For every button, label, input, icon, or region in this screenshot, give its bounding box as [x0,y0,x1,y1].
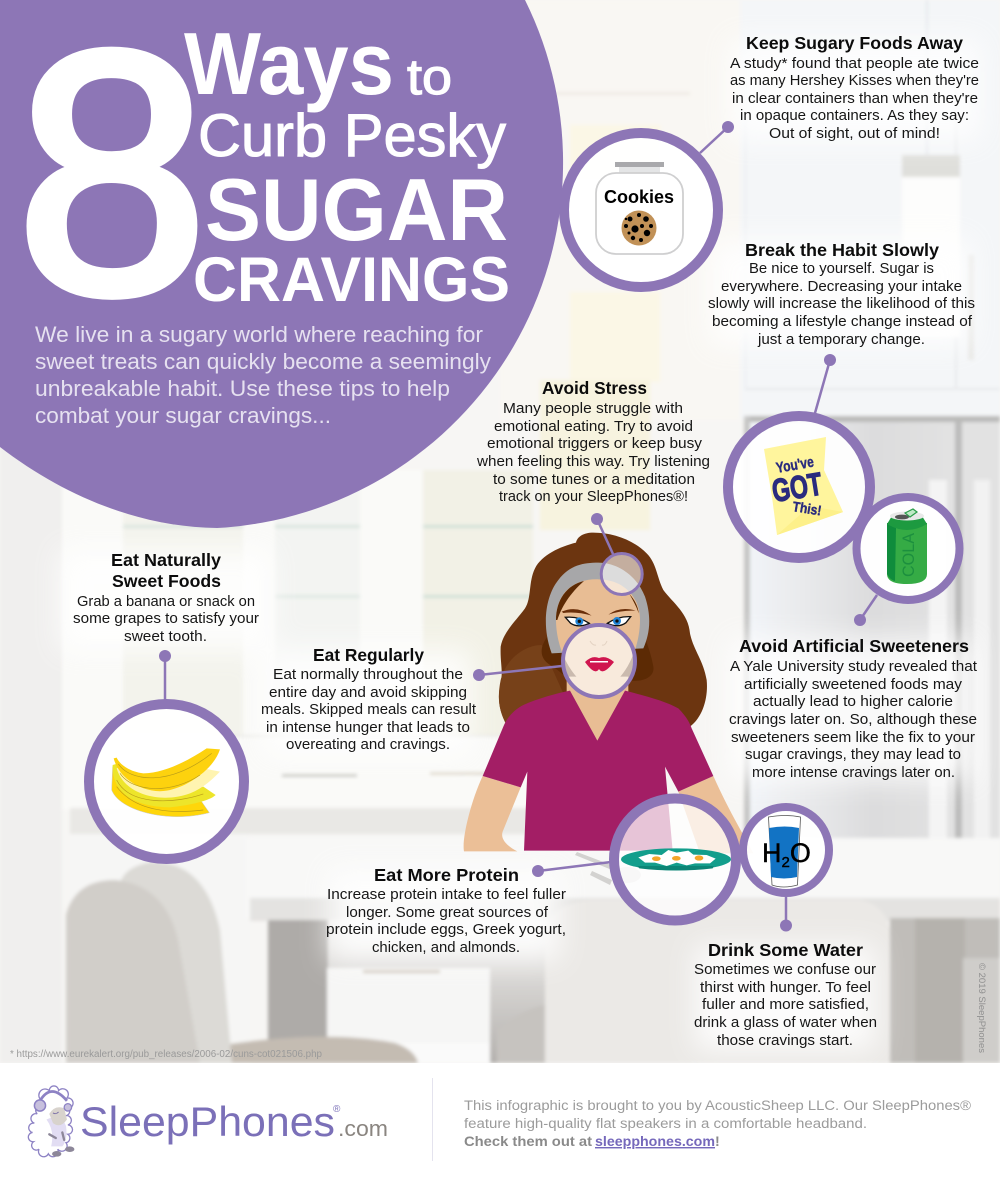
tip: eat regularly: Eat normally throughout the [273,667,463,683]
icon: water glass circle: H [762,838,782,868]
tip: break the habit slowly [708,240,975,348]
tip: break the habit slowly: just a temporary change. [757,332,925,348]
tip: keep sugary foods away: in opaque containers. As they say: [740,108,969,124]
tip: drink some water: fuller and more satisfied, [702,997,869,1013]
arms [464,776,521,851]
tip: eat more protein [326,865,566,956]
tip: avoid stress: Avoid Stress [542,378,647,398]
intro paragraph: combat your sugar cravings... [35,403,331,428]
tip: avoid stress: when feeling this way. Try listening [476,454,710,470]
tip: break the habit slowly: becoming a lifestyle change instead of [712,314,973,330]
tip: avoid artificial sweeteners: artificially sweetened foods may [744,677,963,693]
tip: eat more protein: Increase protein intake to feel fuller [327,887,566,903]
icon: sticky note circle: You've [775,454,815,477]
connector: banana [159,650,171,700]
intro paragraph: unbreakable habit. Use these tips to help [35,376,450,401]
tip: avoid artificial sweeteners: sweeteners seem like the fix to your [731,730,975,746]
icon: sticky note circle: GOT [769,465,825,509]
logo: wordmark: .com [338,1116,388,1141]
title: Ways [184,14,394,113]
headband [546,563,649,653]
logo: wordmark: SleepPhones [80,1098,335,1145]
tip: break the habit slowly: everywhere. Decreasing your intake [721,279,962,295]
tip: break the habit slowly: slowly will increase the likelihood of this [708,296,975,312]
connector: sticky note [815,354,836,413]
tip: eat regularly: in intense hunger that leads to [266,720,470,736]
footer message: sleepphones.com [595,1134,715,1150]
footer message: feature high-quality flat speakers in a comfortable headband. [464,1116,867,1132]
icon: sticky note circle: This! [792,498,823,518]
tip: keep sugary foods away: Keep Sugary Foods Away [746,33,963,53]
chairs [120,862,232,1063]
copyright note: © 2019 SleepPhones [976,963,987,1053]
tip: break the habit slowly: Break the Habit Slowly [745,240,939,260]
title: SUGAR [205,160,508,259]
title [16,0,510,366]
logo: sheep [28,1086,74,1157]
footer message: This infographic is brought to you by AcousticSheep LLC. Our SleepPhones® [464,1098,972,1114]
icon: water glass circle: O [790,838,811,868]
intro paragraph: sweet treats can quickly become a seemingly [35,349,492,374]
tip: drink some water: Sometimes we confuse our [694,962,876,978]
cabinets [62,470,532,810]
footer band [0,1063,1000,1178]
icon: cookie jar circle [564,133,718,287]
icon: cookie jar circle: Cookies [604,187,674,207]
connector: eat regularly [473,666,562,681]
tip: eat naturally sweet foods [73,550,259,645]
shirt [483,691,713,851]
tip: eat more protein: Eat More Protein [374,865,519,885]
tip: eat regularly: overeating and cravings. [286,737,450,753]
icon: cola can circle: COLA [900,533,918,577]
woman illustration [464,533,753,853]
footer message: ! [715,1134,720,1150]
connector: cola [854,595,877,626]
footer message: Check them out at [464,1134,592,1150]
title: to [407,49,452,105]
tip: eat regularly: meals. Skipped meals can result [261,702,476,718]
tip: avoid artificial sweeteners: cravings later on. So, although these [729,712,977,728]
tip: eat more protein: protein include eggs, Greek yogurt, [326,922,566,938]
title: CRAVINGS [193,245,510,315]
tip: avoid stress: to some tunes or a meditation [493,472,695,488]
icon: bananas circle [89,704,244,859]
soft glow behind text [60,40,980,1050]
footer message [464,1098,972,1150]
tip: eat regularly: Eat Regularly [313,645,424,665]
tip: drink some water [694,940,877,1049]
hair [499,533,707,727]
tip: eat more protein: longer. Some great sources of [346,905,549,921]
tip: avoid stress: emotional eating. Try to avoid [494,419,693,435]
tip: drink some water: those cravings start. [717,1033,853,1049]
icon: water glass circle: 2 [782,854,790,871]
tip: avoid artificial sweeteners [729,636,977,781]
tip: eat naturally sweet foods: Grab a banana or snack on [77,594,255,610]
face [556,579,640,689]
tip: avoid artificial sweeteners: Avoid Artificial Sweeteners [739,636,969,656]
title: Curb Pesky [198,102,506,169]
tip: eat regularly [261,645,476,753]
tip: keep sugary foods away: Out of sight, out of mind! [769,126,940,142]
tip: keep sugary foods away: as many Hershey Kisses when they're [730,73,979,89]
tip: avoid stress: emotional triggers or keep busy [487,436,703,452]
tip: avoid artificial sweeteners: A Yale University study revealed that [730,659,977,675]
intro paragraph: We live in a sugary world where reaching for [35,322,484,347]
icon: cola can circle [856,497,960,600]
tip: eat naturally sweet foods: Sweet Foods [112,571,221,591]
connector: cookies [700,121,734,153]
tip: avoid stress [476,378,710,505]
tip: keep sugary foods away: A study* found that people ate twice [730,56,979,72]
icon: sticky note circle [728,416,870,558]
magnifier: face / eat regularly [563,625,635,697]
tip: avoid stress: Many people struggle with [503,401,683,417]
tip: avoid artificial sweeteners: actually lead to higher calorie [753,694,953,710]
purple title circle [0,0,563,528]
footnote url: * https://www.eurekalert.org/pub_releases/2006-02/cuns-cot021506.php [10,1049,322,1060]
tip: drink some water: Drink Some Water [708,940,863,960]
intro paragraph [35,322,492,428]
fridge [744,416,1000,422]
tip: eat naturally sweet foods: Eat Naturally [111,550,221,570]
tip: eat naturally sweet foods: sweet tooth. [124,629,207,645]
icon: water glass circle [743,807,829,893]
connector: water [780,897,792,932]
tip: break the habit slowly: Be nice to yourself. Sugar is [749,261,934,277]
tip: avoid stress: track on your SleepPhones®! [499,489,688,505]
island [245,838,1000,918]
tip: eat regularly: entire day and avoid skipping [269,685,467,701]
fork and knife [575,852,641,885]
neck [567,677,628,744]
icon: plate of eggs circle [614,798,736,920]
tip: drink some water: drink a glass of water when [694,1015,877,1031]
tip: avoid artificial sweeteners: sugar cravings, they may lead to [745,747,961,763]
tip: eat naturally sweet foods: some grapes to satisfy your [73,611,259,627]
logo: wordmark: ® [333,1104,341,1115]
magnifier: headphone / avoid stress [591,513,642,594]
tip: eat more protein: chicken, and almonds. [372,940,520,956]
tip: keep sugary foods away: in clear containers than when they're [732,91,978,107]
eyes [565,617,589,626]
connector: protein [532,862,611,877]
tip: keep sugary foods away [730,33,979,142]
tip: drink some water: thirst with hunger. To feel [700,980,871,996]
tip: avoid artificial sweeteners: more intense cravings later on. [752,765,955,781]
